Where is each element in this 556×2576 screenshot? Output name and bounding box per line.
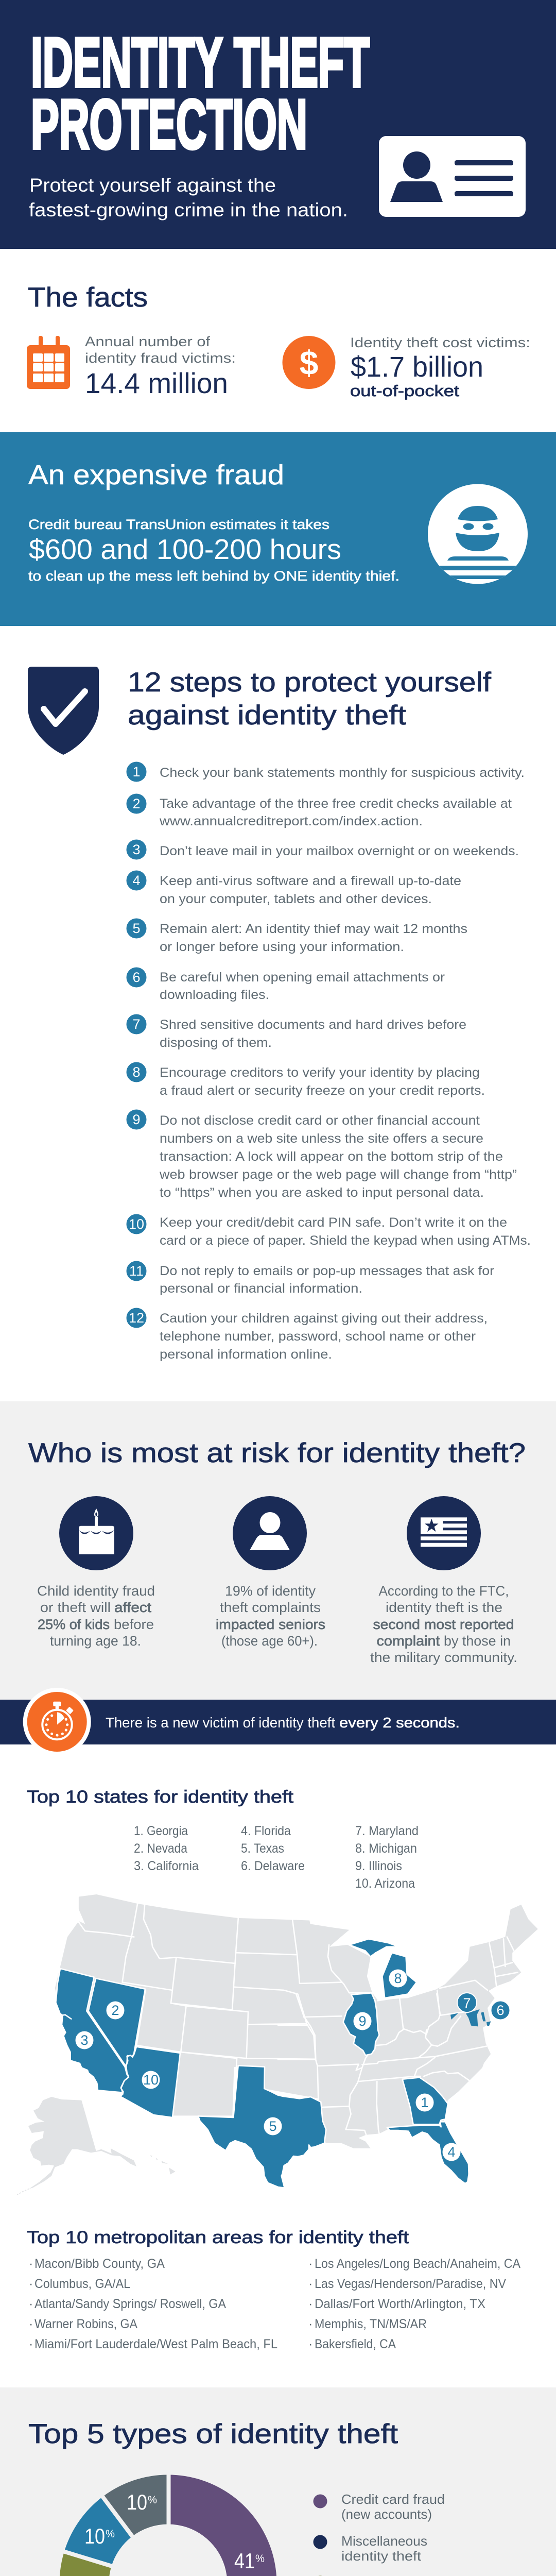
cost text: $600 and 100-200 hours [29, 533, 341, 565]
map number badges: 9 [358, 2013, 367, 2029]
text: children: before [114, 1617, 154, 1632]
subtitle: fastest-growing crime in the nation. [29, 199, 348, 221]
metro list column 1: Macon/Bibb County, GA [34, 2257, 165, 2271]
step 3: Don’t leave mail in your mailbox overnight or on weekends. [160, 844, 519, 858]
step 3 [127, 840, 519, 859]
metro list column 2: Dallas/Fort Worth/Arlington, TX [315, 2297, 485, 2311]
step 9 [127, 1110, 517, 1200]
step 9: web browser page or the web page will change from “http” [159, 1167, 517, 1182]
step 4: 4 [132, 873, 141, 888]
step 6: downloading files. [160, 988, 269, 1002]
metro list column 1: Atlanta/Sandy Springs/ Roswell, GA [34, 2297, 226, 2311]
label: 41%: % [255, 2553, 265, 2565]
label: 10% existing accounts: 10 [127, 2490, 147, 2514]
title [31, 23, 370, 163]
banner text: every 2 seconds. [339, 1715, 460, 1731]
map number badges: 6 [496, 2003, 505, 2018]
step 6: Be careful when opening email attachments or [160, 970, 445, 985]
text: military: complaint [377, 1633, 440, 1649]
panel: who is most at risk [0, 1401, 556, 1700]
step 5: 5 [132, 921, 141, 936]
states ranking list: 7. Maryland [355, 1824, 419, 1838]
step 8 [127, 1062, 485, 1098]
subtitle: Protect yourself against the [29, 175, 276, 196]
donut legend: (new accounts) [341, 2506, 432, 2522]
text: military: the military community. [370, 1650, 517, 1665]
state: Florida [387, 2122, 469, 2183]
metro list column 1: Columbus, GA/AL [34, 2277, 130, 2291]
banner: every 2 seconds [0, 1688, 556, 1756]
step 2: 2 [132, 796, 141, 811]
step 5: or longer before using your information. [160, 940, 404, 954]
Alaska and Hawaii [17, 2097, 176, 2195]
step 9: 9 [132, 1112, 141, 1127]
text: children: turning age 18. [50, 1633, 141, 1649]
donut legend: Miscellaneous [341, 2533, 427, 2549]
metro list column 2: Las Vegas/Henderson/Paradise, NV [315, 2277, 506, 2291]
cost text [28, 517, 399, 584]
state: Illinois [343, 1993, 379, 2055]
banner text [106, 1715, 460, 1731]
label: 10% existing accounts: % [148, 2494, 157, 2506]
step 2: www.annualcreditreport.com/index.action. [159, 814, 423, 828]
text: military [370, 1583, 517, 1665]
metro list column 1: Warner Robins, GA [34, 2317, 137, 2331]
banner text: There is a new victim of identity theft [106, 1715, 335, 1731]
step 7 [127, 1014, 466, 1050]
donut chart [60, 2470, 276, 2576]
map number badges: 5 [269, 2119, 277, 2134]
panel: the facts [27, 282, 530, 400]
step 10 [127, 1214, 531, 1248]
heading: 12 steps: against identity theft [128, 700, 406, 731]
icon: birthday cake [59, 1496, 133, 1570]
metro list column 1 [29, 2257, 277, 2351]
step 6: 6 [132, 970, 141, 985]
states ranking list: 6. Delaware [241, 1859, 305, 1873]
states ranking list: 3. California [134, 1859, 199, 1873]
step 3: 3 [132, 842, 141, 857]
step 8: a fraud alert or security freeze on your credit reports. [160, 1083, 485, 1098]
map number badges [75, 1969, 510, 2161]
donut legend: Credit card fraud [341, 2492, 445, 2507]
text: military: by those in [444, 1633, 511, 1649]
step 9: to “https” when you are asked to input personal data. [160, 1185, 484, 1200]
label: 10% mobile: 10 [84, 2524, 105, 2548]
step 11: 11 [129, 1263, 144, 1279]
states ranking list: 4. Florida [241, 1824, 291, 1838]
icon: masked thief [427, 484, 528, 584]
metro list column 2: · [308, 2297, 312, 2311]
step 7: Shred sensitive documents and hard drives before [160, 1018, 466, 1032]
text: seniors: (those age 60+). [221, 1633, 318, 1649]
subtitle [29, 175, 348, 221]
step 12: Caution your children against giving out their address, [160, 1311, 488, 1326]
step 2 [127, 793, 512, 828]
step 12: 12 [129, 1310, 144, 1326]
map number badges: 1 [421, 2095, 429, 2110]
step 8: Encourage creditors to verify your identity by placing [160, 1065, 480, 1080]
icon: calendar [27, 336, 70, 389]
step 4: on your computer, tablets and other devices. [160, 892, 432, 906]
step 9: transaction: A lock will appear on the bottom strip of the [160, 1149, 503, 1164]
fact: fraud victims: 14.4 million [85, 367, 228, 399]
step 11: Do not reply to emails or pop-up messages that ask for [160, 1264, 494, 1278]
heading: 12 steps [128, 667, 491, 731]
cost text: to clean up the mess left behind by ONE identity thief. [28, 568, 399, 584]
state: Arizona [120, 2047, 180, 2117]
map number badges: 2 [111, 2003, 119, 2018]
states ranking list: 8. Michigan [355, 1841, 417, 1856]
metro list column 1: Miami/Fort Lauderdale/West Palm Beach, FL [34, 2337, 277, 2351]
fact: cost to victims: out-of-pocket [350, 382, 459, 400]
metro list column 1: · [29, 2277, 33, 2291]
text: seniors [216, 1583, 325, 1649]
fact: cost to victims [350, 335, 530, 400]
fact: cost to victims: Identity theft cost victims: [350, 335, 530, 350]
panel: an expensive fraud [0, 432, 556, 626]
states ranking list: 10. Arizona [355, 1876, 415, 1891]
state: Georgia [403, 2077, 448, 2124]
step 7: disposing of them. [160, 1036, 272, 1050]
text: children: 25% of kids [38, 1617, 110, 1632]
metro list column 2: Memphis, TN/MS/AR [315, 2317, 427, 2331]
metro list column 1: · [29, 2317, 33, 2331]
state: Nevada [89, 1978, 145, 2066]
label: 41%: 41 [234, 2549, 255, 2573]
metro list column 2: · [308, 2317, 312, 2331]
step 6 [127, 968, 445, 1002]
states ranking list [134, 1824, 419, 1891]
state: Texas [198, 2065, 326, 2188]
metro list column 2: Bakersfield, CA [315, 2337, 396, 2351]
eastern state borders [278, 1994, 486, 2136]
states ranking list: 9. Illinois [355, 1859, 402, 1873]
icon: shield with check [28, 667, 99, 755]
step 10: Keep your credit/debit card PIN safe. Don’t write it on the [160, 1215, 507, 1230]
map number badges: 4 [447, 2144, 456, 2160]
metro list column 2: Los Angeles/Long Beach/Anaheim, CA [315, 2257, 520, 2271]
step 12 [127, 1308, 488, 1362]
icon: stopwatch [23, 1688, 91, 1756]
step 10: 10 [129, 1216, 144, 1232]
step 12: personal information online. [160, 1347, 332, 1362]
step 1: Check your bank statements monthly for suspicious activity. [160, 766, 525, 780]
text: children: affect [114, 1600, 152, 1615]
step 5 [127, 918, 467, 954]
step 7: 7 [132, 1016, 141, 1032]
text: military: According to the FTC, [379, 1583, 509, 1599]
map number badges: 8 [394, 1971, 402, 1986]
panel: top 5 types [0, 2387, 556, 2576]
step 2: Take advantage of the three free credit checks available at [160, 796, 512, 811]
metro list column 1: · [29, 2297, 33, 2311]
map number badges: 10 [143, 2072, 159, 2088]
step 11: personal or financial information. [160, 1281, 362, 1296]
step 8: 8 [132, 1064, 141, 1080]
metro list column 2 [308, 2257, 520, 2351]
step 9: numbers on a web site unless the site offers a secure [160, 1131, 483, 1146]
step 1 [127, 761, 525, 782]
text: military: second most reported [373, 1617, 514, 1632]
map number badges: 7 [463, 1995, 471, 2011]
text: seniors: impacted seniors [216, 1617, 325, 1632]
icon: dollar coin: $ [300, 344, 318, 382]
text: seniors: 19% of identity [225, 1583, 316, 1599]
metro list column 1: · [29, 2257, 33, 2271]
heading: top 10 states: Top 10 states for identity theft [27, 1787, 294, 1807]
cost text: Credit bureau TransUnion estimates it takes [28, 517, 329, 532]
heading: an expensive fraud: An expensive fraud [28, 460, 284, 490]
panel: top 10 states [17, 1787, 538, 2195]
donut legend [313, 2492, 454, 2576]
text: children: Child identity fraud [37, 1583, 155, 1599]
step 4 [127, 871, 461, 906]
state: California [56, 1969, 129, 2093]
step 10: card or a piece of paper. Shield the keypad when using ATMs. [160, 1233, 531, 1248]
icon: dollar coin [282, 336, 336, 389]
title: PROTECTION [31, 85, 307, 163]
fact: cost to victims: $1.7 billion [351, 350, 483, 383]
states ranking list: 5. Texas [241, 1841, 284, 1856]
heading: 12 steps: 12 steps to protect yourself [128, 667, 491, 698]
state: Delaware [481, 2012, 491, 2026]
heading: the facts: The facts [28, 282, 148, 313]
text: military: identity theft is the [386, 1600, 502, 1615]
label: 10% mobile: % [106, 2528, 115, 2540]
map number badges: 3 [80, 2032, 89, 2048]
metro list column 2: · [308, 2257, 312, 2271]
metro list column 1: · [29, 2337, 33, 2351]
panel: top 10 metropolitan areas [27, 2228, 520, 2351]
step 4: Keep anti-virus software and a firewall up-to-date [160, 874, 461, 888]
heading: top 5 types: Top 5 types of identity theft [28, 2419, 398, 2449]
icon: senior person [233, 1496, 307, 1570]
map of the United States [17, 1894, 538, 2195]
heading: who is most at risk: Who is most at risk for identity theft? [28, 1438, 526, 1468]
contiguous states base [55, 1894, 538, 2148]
step 5: Remain alert: An identity thief may wait 12 months [160, 922, 467, 936]
state: Michigan [349, 1939, 416, 1998]
step 11 [127, 1261, 494, 1296]
heading: metropolitan areas: Top 10 metropolitan areas for identity theft [27, 2228, 409, 2247]
step 12: telephone number, password, school name or other [160, 1329, 476, 1344]
fact: fraud victims: Annual number of [85, 334, 211, 349]
icon: american flag [407, 1496, 481, 1570]
step 1: 1 [132, 764, 141, 779]
metro list column 2: · [308, 2277, 312, 2291]
fact: fraud victims: identity fraud victims: [85, 350, 236, 366]
fact: fraud victims [85, 334, 236, 399]
icon: ID card [379, 136, 526, 217]
panel: header [0, 0, 556, 249]
step 9: Do not disclose credit card or other financial account [160, 1113, 480, 1128]
panel: 12 steps [28, 667, 531, 1362]
text: children: or theft will [40, 1600, 111, 1615]
state: Maryland [450, 2009, 480, 2026]
text: children [37, 1583, 155, 1649]
metro list column 2: · [308, 2337, 312, 2351]
states ranking list: 1. Georgia [134, 1824, 188, 1838]
states ranking list: 2. Nevada [134, 1841, 187, 1856]
text: seniors: theft complaints [220, 1600, 321, 1615]
donut legend: identity theft [341, 2548, 422, 2564]
